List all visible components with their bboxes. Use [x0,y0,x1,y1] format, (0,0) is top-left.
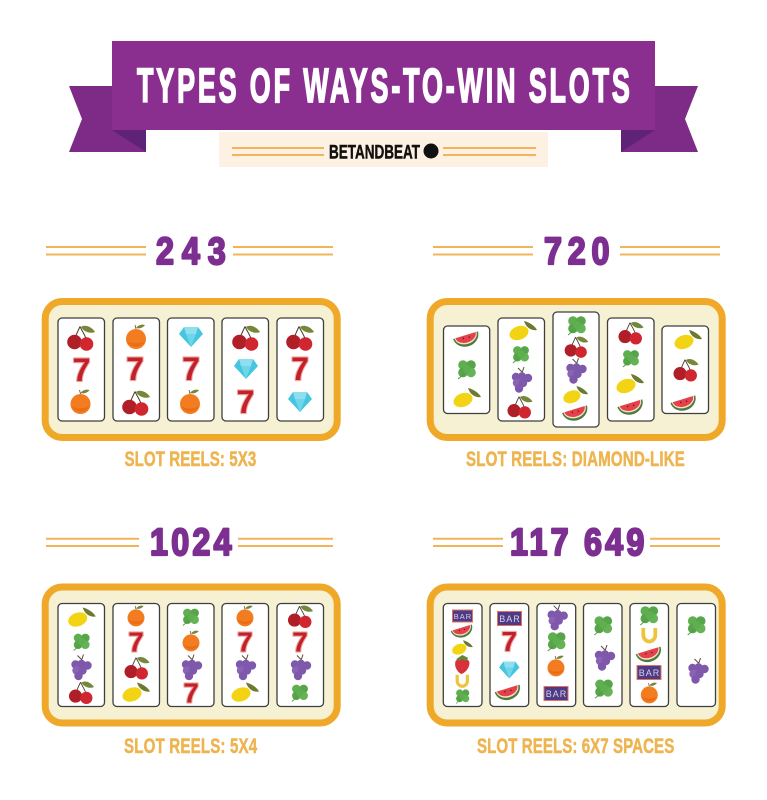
reel 5 [630,604,668,706]
title: TYPES OF WAYS-TO-WIN SLOTS [137,60,630,113]
reel 2 [113,604,160,706]
section: 117 649 [430,522,722,758]
title banner [69,41,698,152]
brand dot [424,144,438,158]
reel 4 [608,318,654,421]
ribbon: main band [112,41,655,130]
section: 720 [430,231,722,471]
heading: 720: 720 [544,231,609,273]
panel: 5x4 reels [45,587,337,723]
reel 3 [553,312,599,427]
label: 5x3: SLOT REELS: 5X3 [124,446,256,471]
brand strip [219,132,548,167]
label: 5x4: SLOT REELS: 5X4 [124,733,258,758]
reel 3: 7 [183,678,199,708]
reel 5: 7 [292,626,308,658]
heading: 117 649: 117 649 [510,522,644,564]
heading: 1024: 1024 [150,522,232,564]
panel: 5x3 reels [45,302,337,438]
label: diamond-like: SLOT REELS: DIAMOND-LIKE [466,446,685,471]
reel 5: 7 [291,351,309,387]
reel 3 [168,318,214,421]
reel 4 [222,604,268,706]
reel 2 [498,318,544,421]
panel: diamond-like reels [430,302,722,438]
reel 3 [168,604,214,708]
reel 2: BAR [499,614,521,624]
heading: 243: 243 [156,231,226,273]
ribbon: right tail [621,86,698,152]
reel 2 [113,318,160,421]
reel 4 [222,318,268,421]
reel 3: BAR [546,689,567,699]
reel 2: 7 [126,351,144,387]
reel 4 [584,604,622,706]
panel: 6x7 reels [430,587,722,723]
reel 3: 7 [182,351,200,387]
reel 2: 7 [128,626,144,658]
reel 3 [537,604,576,706]
section: 1024 [45,522,337,758]
ribbon: left tail [69,86,146,152]
label: 6x7 spaces: SLOT REELS: 6X7 SPACES [477,733,674,758]
brand name: BETANDBEAT [329,142,420,164]
reel 5 [662,326,708,414]
reel 5 [277,318,324,421]
reel 2 [490,604,529,706]
reel 1 [58,318,104,421]
section: 243 [45,231,337,471]
reel 5: BAR [639,668,660,678]
reel 1 [444,326,490,414]
reel 1: BAR [454,612,472,621]
reel 2: 7 [502,626,517,657]
reel 1 [58,604,104,706]
reel 1 [443,604,482,706]
reel 6 [677,604,716,706]
reel 1: 7 [73,352,90,388]
reel 4: 7 [237,626,253,658]
reel 5 [277,604,324,706]
reel 4: 7 [237,384,254,420]
